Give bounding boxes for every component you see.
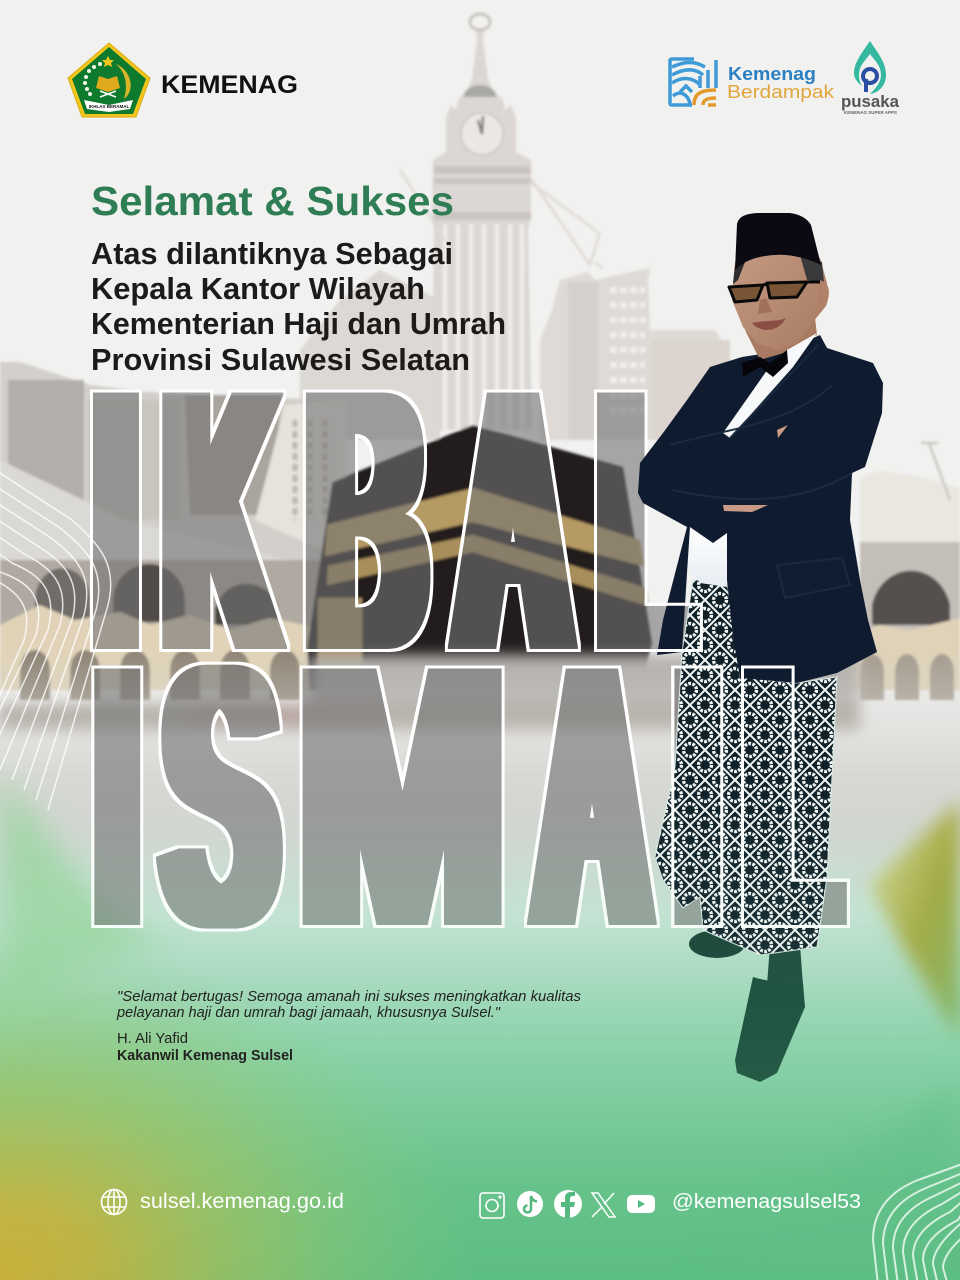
left buildings: [0, 362, 345, 590]
logo: Kemenag emblem: IKHLAS BERAMAL: [89, 104, 129, 109]
icon: [670, 59, 716, 105]
neck: [745, 318, 817, 360]
decorative curved lines left: [0, 460, 111, 810]
glasses: [729, 282, 820, 302]
lower courtyard: [0, 655, 860, 731]
nose and mouth: [758, 298, 772, 314]
big name: IKBAL ISMAIL (outlined letters): A: [457, 314, 569, 728]
heading: Selamat & Sukses: Selamat & Sukses: [91, 178, 454, 224]
icon: instagram: [480, 1193, 504, 1218]
right buildings: [840, 443, 960, 700]
outlines in front of person: L: [747, 588, 839, 1003]
big name: IKBAL ISMAIL (outlined letters): I: [97, 314, 135, 727]
big name: IKBAL ISMAIL (outlined letters): [97, 312, 839, 1004]
logo: pusaka: KEMENAG SUPER APPS: [844, 110, 897, 115]
big name: IKBAL ISMAIL (outlined letters): I: [98, 590, 137, 1003]
quote: "Selamat bertugas! Semoga amanah ini sukses meningkatkan kualitas: [117, 989, 581, 1005]
logo: Kemenag Berdampak: [670, 59, 835, 105]
quote: H. Ali Yafid: [117, 1031, 188, 1047]
big name: IKBAL ISMAIL (outlined letters): A: [536, 590, 648, 1004]
head: [729, 213, 829, 350]
big name: IKBAL ISMAIL (outlined letters): K: [165, 315, 276, 728]
green overlay over lower part: [0, 760, 960, 1280]
quote: pelayanan haji dan umrah bagi jamaah, khususnya Sulsel.": [116, 1005, 501, 1021]
logo text: KEMENAG: KEMENAG: [161, 71, 298, 99]
person: man in black jacket and batik sarong: [638, 213, 883, 1082]
icon: X: [592, 1193, 615, 1217]
logo: Kemenag emblem: [68, 43, 150, 117]
big name: IKBAL ISMAIL (outlined letters): M: [299, 589, 505, 1003]
background photo: Makkah clock tower and Kaaba: [0, 14, 960, 731]
logo: pusaka: [841, 41, 900, 115]
subheading text: Provinsi Sulawesi Selatan: [91, 342, 470, 377]
icon: globe: [102, 1190, 126, 1214]
outlines in front of person: L: [600, 312, 692, 727]
outlines in front of person: [644, 600, 850, 928]
subheading text: [91, 236, 506, 377]
hat: [735, 213, 821, 270]
background fade and green gradient: [0, 650, 960, 1280]
sleeve and lapel shading: [670, 345, 852, 598]
black jacket: [638, 335, 883, 683]
website: sulsel.kemenag.go.id: [140, 1190, 344, 1213]
logo: pusaka: pusaka: [841, 92, 900, 111]
bow tie: [742, 350, 788, 377]
batik sarong: [655, 580, 837, 955]
subheading text: Kementerian Haji dan Umrah: [91, 306, 506, 341]
logo: Kemenag Berdampak: Kemenag: [728, 64, 816, 84]
subheading text: Kepala Kantor Wilayah: [91, 271, 425, 306]
left shoe: [689, 930, 745, 958]
quote: Kakanwil Kemenag Sulsel: [117, 1048, 293, 1064]
Kaaba: [307, 425, 652, 690]
right sock and shoe: [735, 945, 805, 1082]
big name: IKBAL ISMAIL (outlined letters): L: [747, 588, 839, 1003]
quote: [116, 989, 581, 1064]
subheading text: Atas dilantiknya Sebagai: [91, 236, 453, 271]
left towers: [300, 170, 445, 440]
shirt front and collar: [723, 333, 817, 438]
icon: youtube: [627, 1195, 655, 1213]
big name: IKBAL ISMAIL (outlined letters): B: [308, 314, 425, 727]
clock tower: [432, 14, 532, 430]
colonnade left: [0, 560, 330, 700]
big name: IKBAL ISMAIL (outlined letters): S: [164, 589, 277, 1002]
big name: IKBAL ISMAIL (outlined letters): L: [600, 312, 692, 727]
right towers: [530, 180, 730, 440]
white shirt: [687, 527, 727, 587]
big name: IKBAL ISMAIL (outlined letters): I: [678, 590, 717, 1003]
decorative curved lines bottom right: [873, 1163, 960, 1280]
icon: tiktok: [517, 1191, 543, 1217]
icon: facebook: [554, 1190, 582, 1218]
logo: Kemenag Berdampak: Berdampak: [727, 82, 835, 102]
social handle: @kemenagsulsel53: [672, 1191, 861, 1213]
outlines in front of person: I: [678, 590, 717, 1003]
hands: [723, 425, 788, 512]
